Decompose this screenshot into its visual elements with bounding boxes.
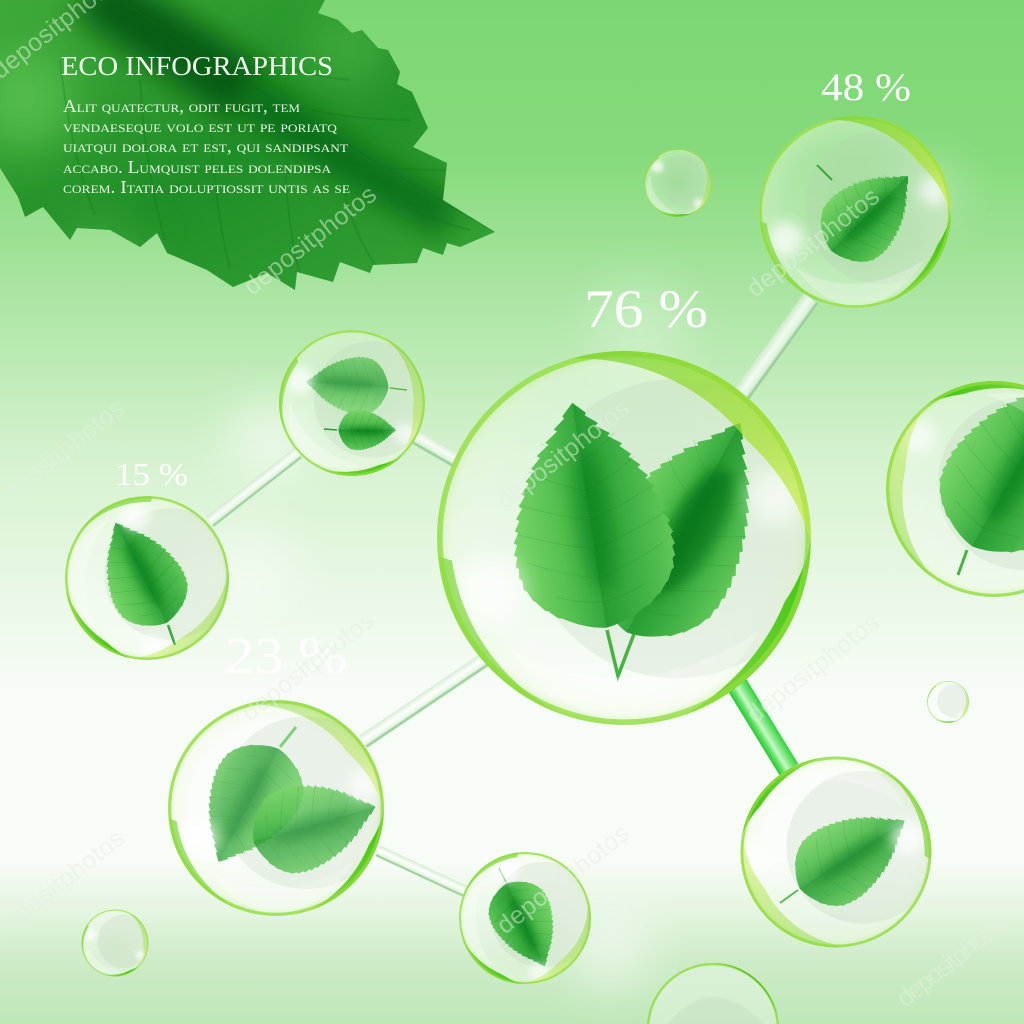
watermark: depositphotos <box>236 606 380 727</box>
watermark: depositphotos <box>491 394 635 515</box>
body text: Alit quatectur, odit fugit, tem <box>63 96 300 116</box>
big leaf shape <box>0 0 500 305</box>
body text: vendaeseque volo est ut pe poriatq <box>63 116 337 136</box>
label: 48%: 48 % <box>821 66 911 109</box>
big leaf with title <box>0 0 500 305</box>
droplet: bottom left <box>68 896 162 990</box>
translucent leaf <box>304 353 390 417</box>
bubble: 15% <box>52 484 242 673</box>
title: ECO INFOGRAPHICS <box>61 51 333 81</box>
droplet: top <box>632 137 724 229</box>
connector: main to 48% <box>730 293 819 406</box>
small leaf <box>338 409 396 451</box>
watermark: depositphotos <box>891 908 1015 1013</box>
label: 15%: 15 % <box>115 456 188 492</box>
body text <box>63 96 350 197</box>
body text: accabo. Lumquist peles dolendipsa <box>63 157 331 177</box>
bubble: 48% <box>759 116 959 308</box>
connector: 23% to bottom bubble <box>375 846 468 897</box>
back leaf <box>565 390 802 666</box>
bubble: main 76% <box>437 351 826 725</box>
connector: green main to lower right <box>725 674 798 775</box>
label: 23%: 23 % <box>225 628 347 685</box>
droplet: right <box>919 673 977 731</box>
label: 76%: 76 % <box>584 279 708 339</box>
watermark: depositphotos <box>741 182 885 303</box>
stems <box>607 630 634 676</box>
connector: top-left bubble to 15% <box>206 448 302 527</box>
watermark: depositphotos <box>491 819 635 940</box>
body text: corem. Itatia doluptiossit untis as se <box>63 177 350 197</box>
bubble: bottom <box>459 852 596 984</box>
body text: uiatqui dolora et est, qui sandipsant <box>63 136 349 156</box>
droplet: bottom edge <box>648 963 778 1024</box>
bubble: top left two leaves <box>249 300 455 506</box>
watermark: depositphotos <box>238 180 382 301</box>
front leaf <box>493 391 686 640</box>
bubble: 23% <box>168 700 393 916</box>
bubble: lower right <box>725 741 946 962</box>
connector: main to top-left bubble <box>408 428 459 467</box>
soft glows behind bubbles <box>205 160 960 990</box>
watermark: depositphotos <box>741 608 885 729</box>
connector: main to 23% <box>359 653 490 748</box>
bubble: right edge <box>886 381 1024 597</box>
